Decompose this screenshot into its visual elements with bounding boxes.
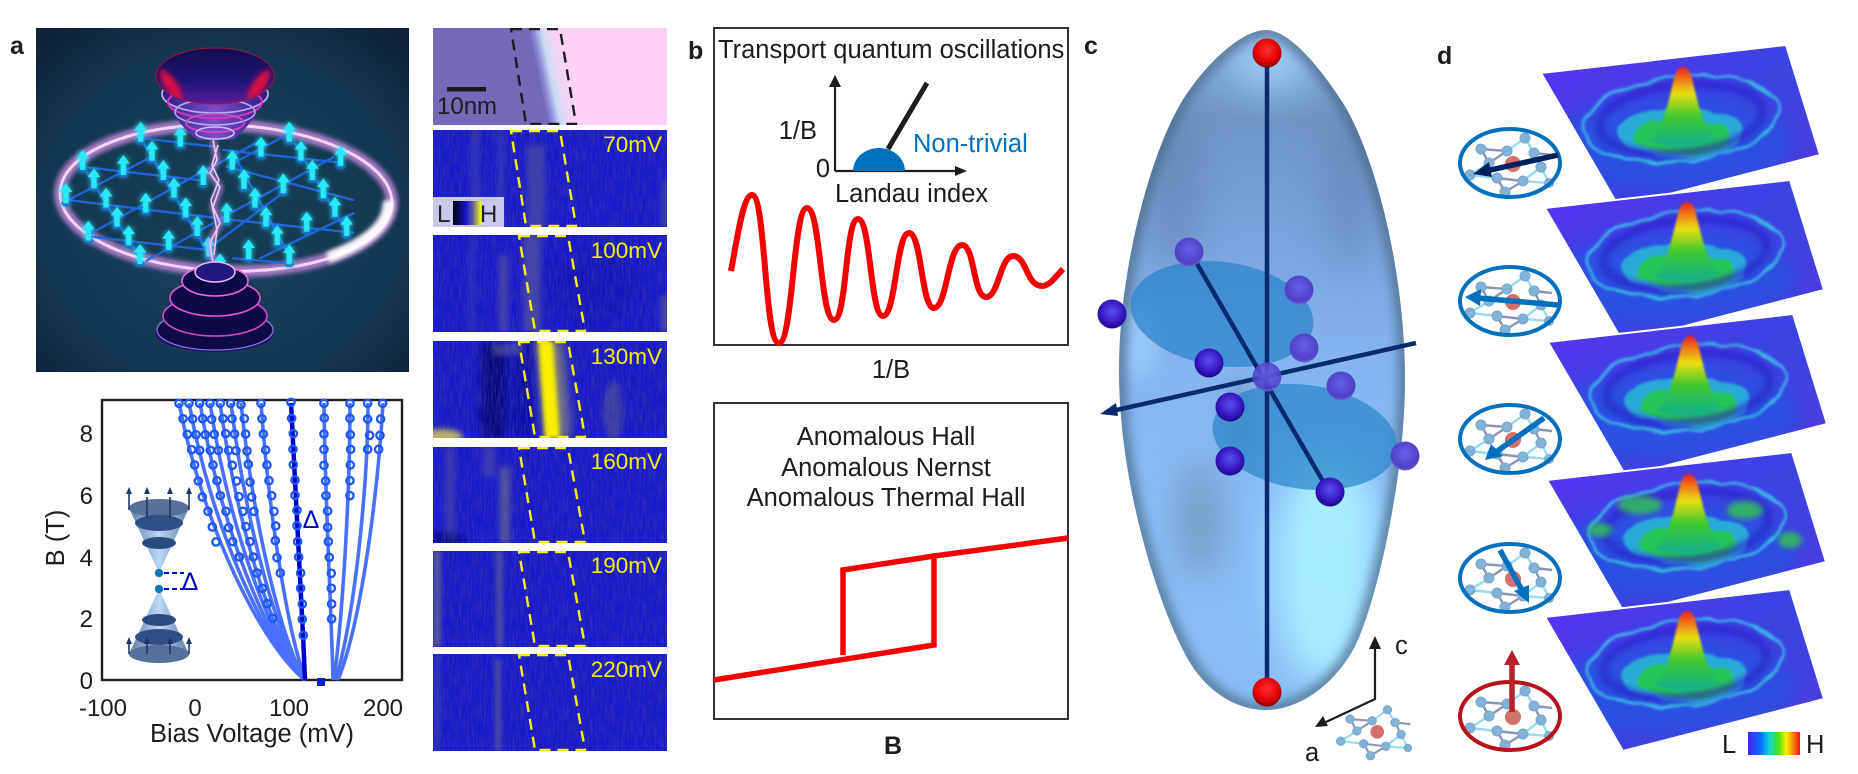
STM tip funnel <box>156 48 274 140</box>
axis tick labels: 100 <box>269 695 309 722</box>
hysteresis loop <box>714 538 1068 680</box>
panel d: spin orientation icon 3 <box>1460 405 1560 473</box>
panel c: crystal axes triad: a <box>1305 739 1320 767</box>
axis tick labels: 0 <box>80 668 93 695</box>
panel a: dI/dV map 220mV <box>433 654 667 751</box>
panel c label: c <box>1084 32 1098 60</box>
fan lines <box>179 403 383 680</box>
panel b label: b <box>688 37 703 65</box>
axis tick labels: 4 <box>80 545 93 572</box>
Landau fan inset: Landau index <box>835 180 988 208</box>
blue planes <box>1124 250 1320 378</box>
axis tick labels: 8 <box>80 421 93 448</box>
panel a: dI/dV map 190mV <box>433 551 667 647</box>
panel a: dI/dV map 130mV <box>419 341 667 445</box>
panel a: dI/dV map 70mV <box>433 130 669 228</box>
panel d label: d <box>1437 42 1452 70</box>
axis tick labels: -100 <box>79 695 127 722</box>
zeroth Landau level <box>291 403 305 680</box>
axis tick labels: 200 <box>363 695 403 722</box>
inset: gapped Dirac cones: Δ <box>182 568 198 596</box>
axis lines <box>1112 53 1416 692</box>
x axis title: Bias Voltage (mV) <box>150 720 354 748</box>
text block: Anomalous Thermal Hall <box>747 484 1025 512</box>
panel c: crystal axes triad: c <box>1395 632 1408 660</box>
panel a: dI/dV map 100mV <box>433 235 669 332</box>
scale bar <box>447 87 486 92</box>
x axis label 1/B: 1/B <box>872 356 910 384</box>
panel b: transport quantum oscillations box <box>714 28 1068 345</box>
scale bar text: 10nm <box>437 93 497 120</box>
panel b: anomalous transport box <box>714 403 1068 719</box>
voltage label: 70mV <box>603 132 662 157</box>
delta label on fan: Δ <box>303 506 319 534</box>
panel d: spin orientation icon 2 <box>1460 267 1560 335</box>
voltage label: 220mV <box>591 657 662 682</box>
voltage label: 190mV <box>591 553 662 578</box>
arrow head of in-plane axis <box>1100 403 1118 416</box>
panel d: surface map 1 <box>1541 45 1820 207</box>
panel d: surface map 4 <box>1547 452 1826 614</box>
atoms <box>1098 238 1420 506</box>
Landau fan inset <box>779 75 1028 208</box>
panel d: color legend L to H <box>1722 731 1824 759</box>
disc ring <box>57 118 395 278</box>
panel a label: a <box>10 32 25 60</box>
panel c: ellipsoid with crystal structure <box>1098 20 1420 720</box>
axis tick labels <box>79 421 403 722</box>
sample stage <box>156 262 273 352</box>
axis tick labels: 2 <box>80 606 93 633</box>
panel a: STM topography with scale bar <box>433 28 667 125</box>
y axis title: B (T) <box>42 510 70 566</box>
Landau fan inset: Non-trivial <box>913 130 1028 158</box>
ellipsoid body <box>1119 30 1405 710</box>
color scale L to H: L <box>437 201 450 228</box>
panel d: surface map 5 <box>1545 589 1824 751</box>
text block: Anomalous Nernst <box>781 454 991 482</box>
voltage label: 100mV <box>591 238 662 263</box>
panel d: color legend L to H: H <box>1806 731 1824 759</box>
panel d: spin orientation icon 4 <box>1460 544 1560 612</box>
voltage label: 160mV <box>591 449 662 474</box>
panel a: dI/dV map 160mV <box>419 447 667 546</box>
panel d: spin orientation icon 1 <box>1460 129 1560 197</box>
panel d: surface map 3 <box>1548 314 1827 476</box>
voltage label: 130mV <box>591 344 662 369</box>
dashed region <box>511 29 576 124</box>
panel d: spin orientation icon 5 <box>1460 650 1560 750</box>
color scale L to H: H <box>480 201 497 228</box>
axis tick labels: 0 <box>188 695 202 722</box>
Landau fan inset: 0 <box>816 155 830 183</box>
panel d: surface map 2 <box>1545 180 1824 342</box>
color scale L to H <box>433 197 504 228</box>
heading: Transport quantum oscillations <box>718 36 1064 64</box>
inset: gapped Dirac cones <box>126 487 198 663</box>
axis tick labels: 6 <box>80 483 93 510</box>
gap marker on x axis <box>317 678 325 686</box>
red apex atoms <box>1252 38 1282 706</box>
panel a: artistic illustration of STM tip over kagome lattice <box>36 28 409 372</box>
lightning between tip and stage <box>210 140 220 263</box>
kagome lattice with spin arrows <box>60 122 353 276</box>
Landau fan inset: 1/B <box>779 117 817 145</box>
measured data points <box>175 399 386 639</box>
panel c: crystal axes triad <box>1305 632 1412 767</box>
panel a: Landau fan chart B versus bias voltage <box>42 399 403 748</box>
plot frame <box>102 400 402 680</box>
panel d: color legend L to H: L <box>1722 731 1736 759</box>
oscillation curve <box>731 195 1063 343</box>
text block <box>747 423 1025 512</box>
text block: Anomalous Hall <box>797 423 975 451</box>
x axis label B: B <box>884 732 902 760</box>
